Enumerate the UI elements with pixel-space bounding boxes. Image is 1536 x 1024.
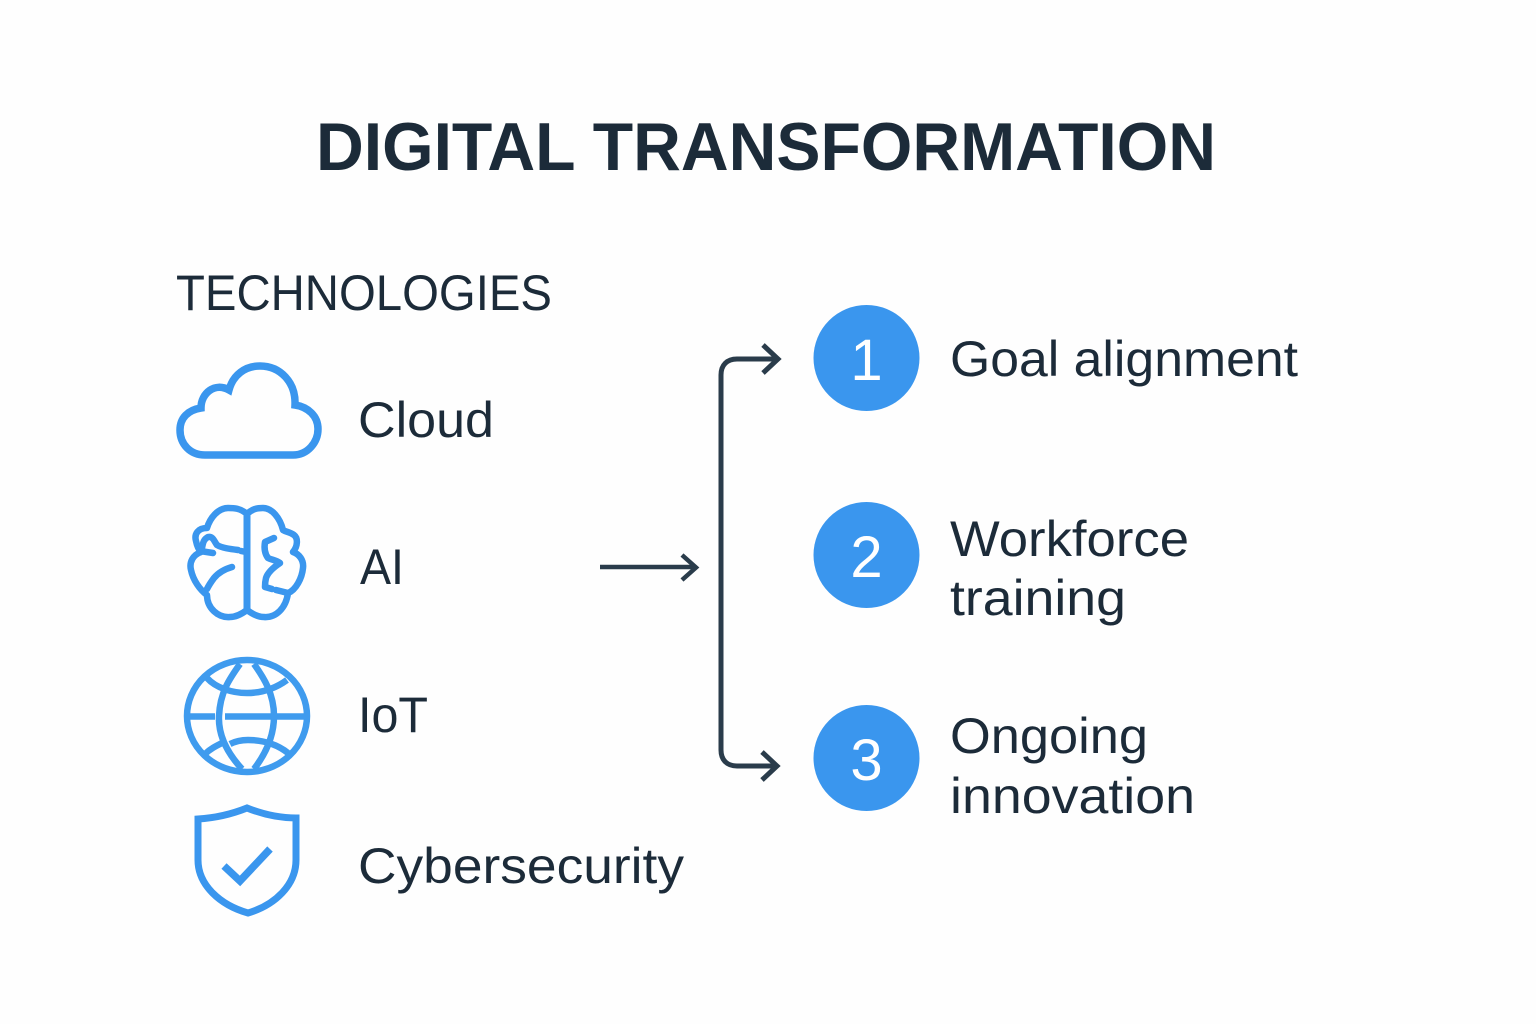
step 1 label: Goal alignment (950, 331, 1298, 387)
icon: cloud (180, 366, 318, 455)
icon: brain (190, 508, 303, 617)
icon: shield with check (198, 808, 296, 913)
step 2 label: training (950, 570, 1126, 626)
panel: technologies (176, 265, 684, 913)
arrow: bracket to steps (721, 345, 778, 780)
step 2 badge (814, 502, 920, 608)
step 2 badge: 2 (850, 525, 883, 590)
heading: technologies: TECHNOLOGIES (176, 265, 552, 321)
step 1 badge: 1 (850, 328, 883, 393)
icon: globe (187, 660, 307, 772)
step 3 label: innovation (950, 768, 1195, 824)
step 2 label (950, 511, 1189, 626)
step 3 badge (814, 705, 920, 811)
step 3 badge: 3 (850, 728, 883, 793)
label: cloud: Cloud (358, 392, 494, 448)
label: ai: AI (360, 539, 404, 595)
step 3 label: Ongoing (950, 708, 1148, 764)
step 2 label: Workforce (950, 511, 1189, 567)
step 1 badge (814, 305, 920, 411)
panel: steps (814, 305, 1298, 824)
arrow: technologies to steps (600, 555, 696, 580)
label: cybersecurity: Cybersecurity (358, 838, 684, 894)
title: DIGITAL TRANSFORMATION (316, 109, 1216, 185)
step 3 label (950, 708, 1195, 824)
label: iot: IoT (358, 687, 428, 743)
